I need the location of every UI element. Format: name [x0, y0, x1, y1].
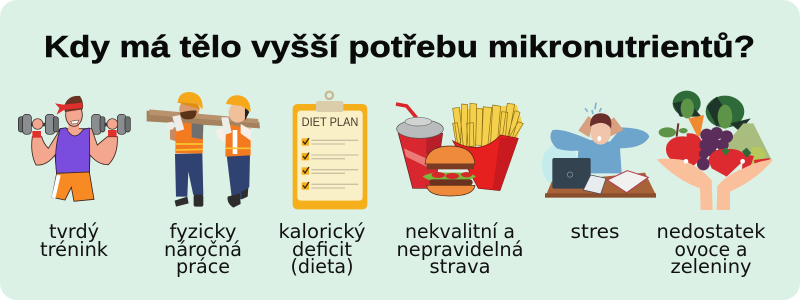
icon: fast food — [396, 103, 523, 196]
label: fyzicky náročná práce: náročná — [164, 238, 242, 261]
label: nekvalitní a nepravidelná strava: nekvalitní a — [405, 220, 515, 243]
label: nekvalitní a nepravidelná strava: strava — [430, 255, 490, 278]
label: fyzicky náročná práce: práce — [176, 255, 230, 278]
label: kalorický deficit (dieta): (dieta) — [290, 255, 354, 278]
label: tvrdý trénink: tvrdý — [49, 220, 99, 243]
icon: construction workers carrying planks — [147, 92, 260, 208]
label: tvrdý trénink: trénink — [40, 238, 109, 261]
clipboard heading: DIET PLAN — [302, 115, 358, 129]
label: nedostatek ovoce a zeleniny — [656, 220, 766, 278]
label: fyzicky náročná práce — [164, 220, 242, 278]
label: nedostatek ovoce a zeleniny: zeleniny — [670, 255, 752, 278]
label: nekvalitní a nepravidelná strava — [396, 220, 524, 278]
label: nedostatek ovoce a zeleniny: nedostatek — [656, 220, 766, 243]
label: nedostatek ovoce a zeleniny: ovoce a — [674, 238, 748, 261]
icon: hands holding fruit and vegetables — [657, 91, 773, 210]
label: tvrdý trénink — [40, 220, 109, 261]
icon: stressed student at desk — [542, 103, 656, 198]
icon: weightlifter — [18, 96, 130, 201]
label: stres: stres — [570, 220, 620, 243]
label: nekvalitní a nepravidelná strava: nepravidelná — [396, 238, 524, 261]
icon: diet plan clipboard — [293, 92, 367, 209]
label: kalorický deficit (dieta): deficit — [292, 238, 352, 261]
label: kalorický deficit (dieta): kalorický — [278, 220, 366, 243]
label: kalorický deficit (dieta) — [278, 220, 366, 278]
title: Kdy má tělo vyšší potřebu mikronutrientů? — [44, 29, 755, 64]
label: fyzicky náročná práce: fyzicky — [170, 220, 236, 243]
